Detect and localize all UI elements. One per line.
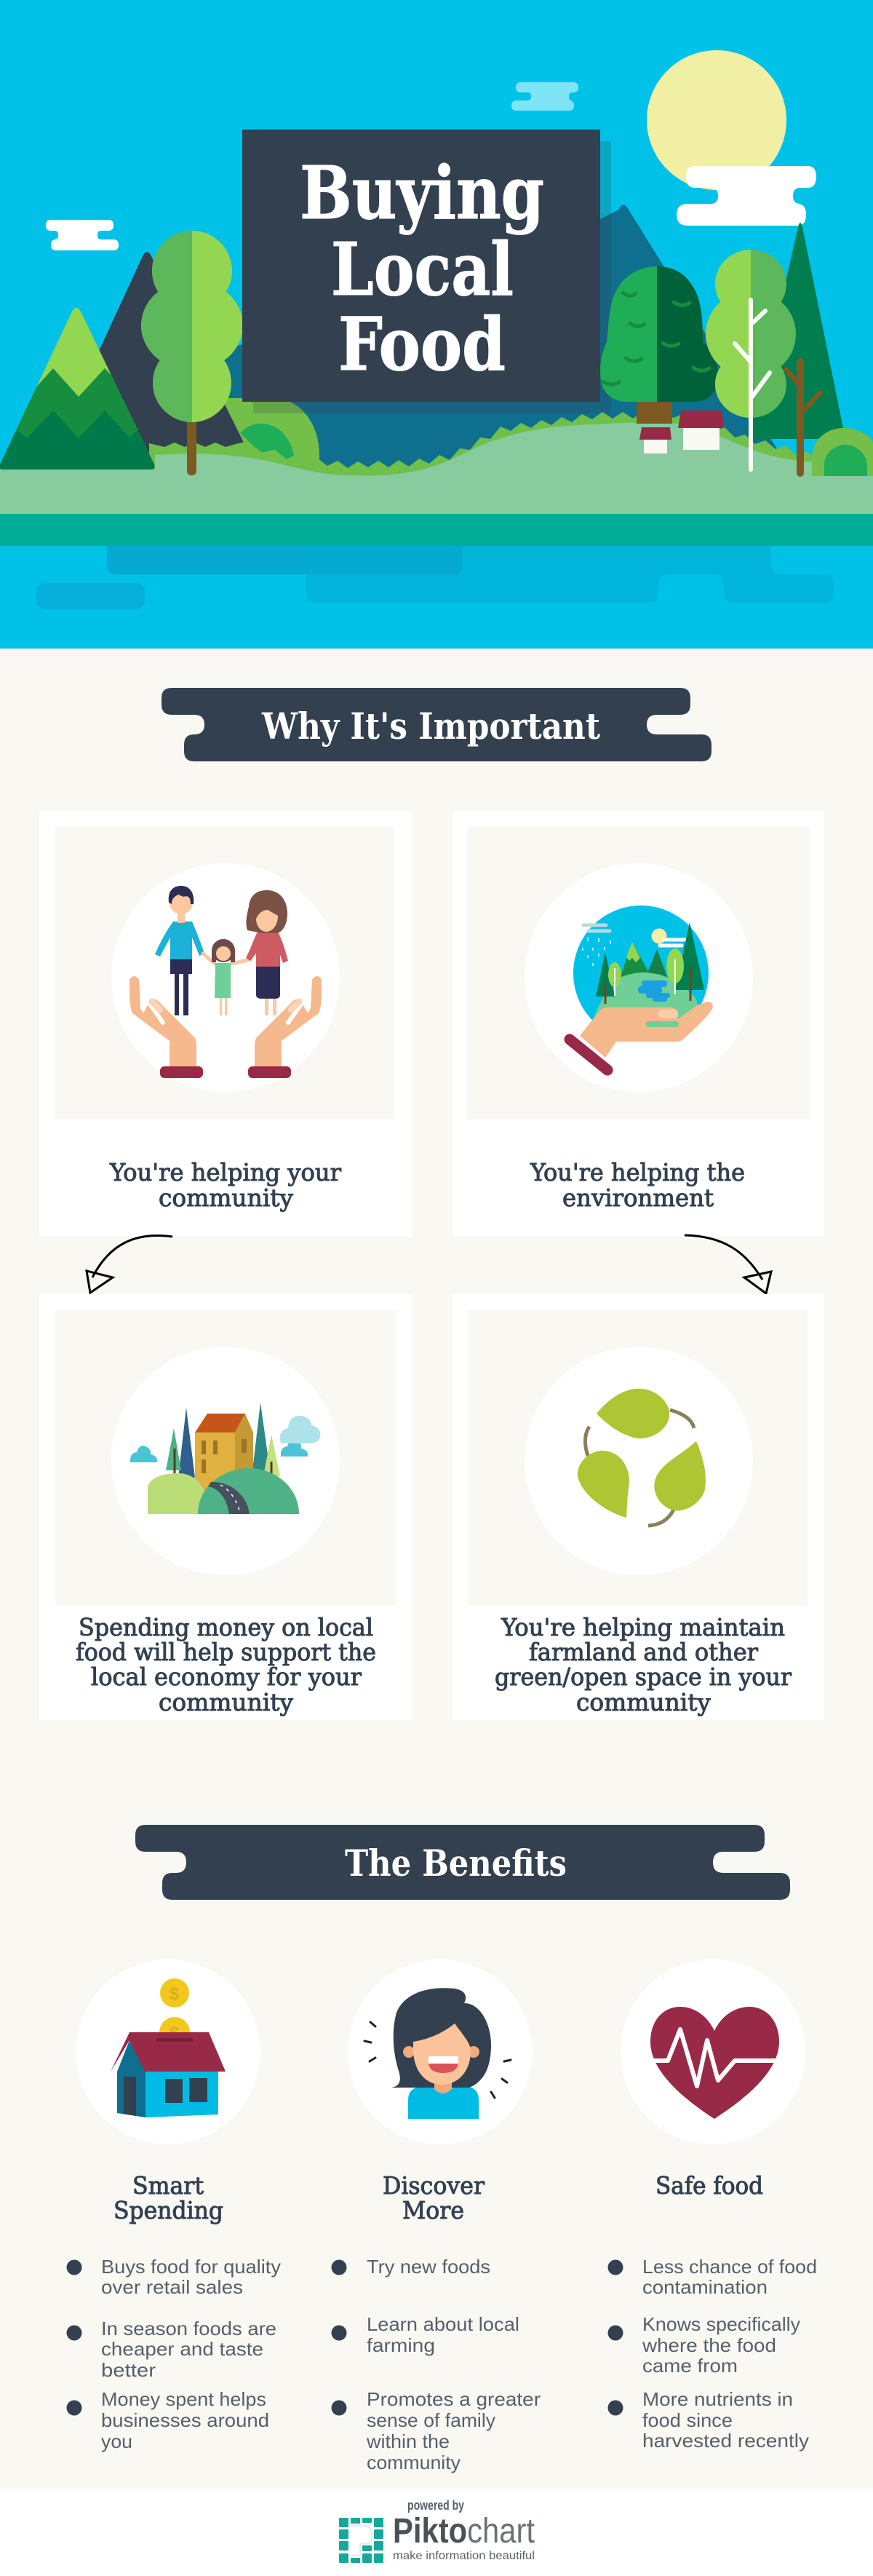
bullet list: farming xyxy=(367,2334,435,2356)
icon: three leaves xyxy=(578,1389,706,1526)
house: small xyxy=(639,427,671,453)
sun xyxy=(647,50,786,190)
arrow: right xyxy=(685,1235,771,1293)
caption: community xyxy=(576,1688,711,1716)
piktochart wordmark: Piktochart xyxy=(393,2512,535,2551)
title xyxy=(300,150,544,387)
card: local economy xyxy=(39,1294,412,1720)
bullet list: Money spent helps xyxy=(101,2388,266,2410)
title box shadow xyxy=(253,141,611,413)
column: smart spending xyxy=(67,1959,281,2452)
bullet list xyxy=(608,2256,817,2452)
heading: More xyxy=(402,2196,464,2224)
ground xyxy=(0,423,873,514)
heading: Spending xyxy=(113,2196,223,2224)
icon: family in hands xyxy=(129,886,322,1078)
title: Local xyxy=(331,226,514,312)
bullet list: contamination xyxy=(642,2276,768,2298)
mother xyxy=(246,890,288,1015)
tagline: make information beautiful xyxy=(393,2550,535,2562)
title: Buying xyxy=(300,150,544,236)
heading: Discover xyxy=(383,2171,485,2200)
cloud: left white xyxy=(46,220,119,250)
caption: You're helping the xyxy=(530,1158,745,1186)
bullet list: better xyxy=(101,2359,156,2381)
left hand xyxy=(129,976,203,1078)
tree: bushy xyxy=(600,266,718,424)
heading: Smart xyxy=(132,2171,204,2200)
tree: right slim xyxy=(706,250,796,469)
bullet list: harvested recently xyxy=(642,2430,809,2452)
teal band xyxy=(0,514,873,546)
bullet list: businesses around xyxy=(101,2409,269,2431)
section banner: the benefits xyxy=(135,1825,790,1900)
title: Food xyxy=(338,301,506,387)
section banner: why it's important xyxy=(162,688,711,761)
heading: Safe food xyxy=(655,2171,763,2200)
title box xyxy=(242,130,600,402)
column: safe food xyxy=(608,1959,817,2452)
bullet list: Promotes a greater xyxy=(367,2388,541,2410)
arrow: left xyxy=(87,1236,172,1293)
daughter xyxy=(203,939,251,1015)
right hand xyxy=(248,976,322,1078)
hero illustration xyxy=(0,0,873,649)
bullet list: where the food xyxy=(642,2334,776,2356)
caption: You're helping your xyxy=(109,1158,342,1186)
caption: green/open space in your xyxy=(495,1662,792,1691)
bullet list: came from xyxy=(642,2355,738,2377)
bush: right xyxy=(812,428,873,476)
bullet list: sense of family xyxy=(367,2409,495,2431)
jagged grass edge xyxy=(149,411,873,480)
card: helping the environment xyxy=(453,811,824,1237)
caption: farmland and other xyxy=(529,1638,759,1666)
icon: world in hand xyxy=(570,905,713,1070)
caption: food will help support the xyxy=(76,1638,376,1666)
mountain: teal back xyxy=(218,205,787,473)
card: helping your community xyxy=(39,811,412,1237)
footer xyxy=(0,2489,873,2576)
bullet list: Knows specifically xyxy=(642,2313,800,2335)
powered by: powered by xyxy=(407,2498,464,2513)
father xyxy=(155,886,204,1015)
section banner: the benefits: The Benefits xyxy=(345,1842,567,1885)
bullet list: cheaper and taste xyxy=(101,2338,263,2360)
caption: community xyxy=(159,1688,293,1716)
bullet list: within the xyxy=(366,2430,450,2452)
bullet list: over retail sales xyxy=(101,2276,243,2298)
caption: Spending money on local xyxy=(79,1613,373,1641)
bullet list: Try new foods xyxy=(367,2256,490,2278)
bullet list xyxy=(332,2256,541,2473)
bullet list: Learn about local xyxy=(367,2313,519,2335)
water reflections xyxy=(36,546,834,609)
icon: piggy-bank house xyxy=(111,1978,226,2117)
bush: left xyxy=(218,398,319,473)
icon: piggy-bank house: $ xyxy=(170,2024,180,2043)
card: maintain farmland xyxy=(453,1294,824,1720)
caption xyxy=(76,1613,376,1716)
bullet list: food since xyxy=(642,2409,733,2431)
bullet list: In season foods are xyxy=(101,2318,276,2339)
caption: community xyxy=(159,1184,293,1212)
bullet list xyxy=(67,2256,281,2452)
column: discover more xyxy=(332,1959,541,2473)
icon: smiling woman xyxy=(364,1988,511,2119)
bullet list: you xyxy=(101,2430,132,2452)
caption: local economy for your xyxy=(91,1662,362,1691)
heading xyxy=(113,2171,223,2224)
bullet list: Less chance of food xyxy=(642,2256,817,2278)
tree: branch brown xyxy=(786,362,820,473)
icon: town on hills xyxy=(130,1403,320,1514)
bullet list: community xyxy=(367,2452,461,2473)
mountain: navy xyxy=(73,252,245,466)
tall dark green tree xyxy=(749,223,845,439)
bullet list: Buys food for quality xyxy=(101,2256,281,2278)
caption xyxy=(530,1158,745,1212)
heading xyxy=(383,2171,485,2224)
bush: left inner xyxy=(240,424,294,460)
mountain: green left xyxy=(0,307,154,469)
caption xyxy=(495,1613,792,1716)
cloud: small blue xyxy=(511,82,578,111)
bullet list: More nutrients in xyxy=(642,2388,793,2410)
icon: heart with pulse xyxy=(650,2007,780,2119)
house: large xyxy=(678,411,724,450)
caption: environment xyxy=(562,1184,714,1212)
section banner: why it's important: Why It's Important xyxy=(261,705,600,748)
caption xyxy=(109,1158,342,1212)
tree: left xyxy=(141,231,243,475)
icon: piggy-bank house: $ xyxy=(170,1984,180,2004)
piktochart logo mark xyxy=(339,2518,383,2563)
caption: You're helping maintain xyxy=(501,1613,785,1641)
cloud: large white xyxy=(677,166,816,226)
